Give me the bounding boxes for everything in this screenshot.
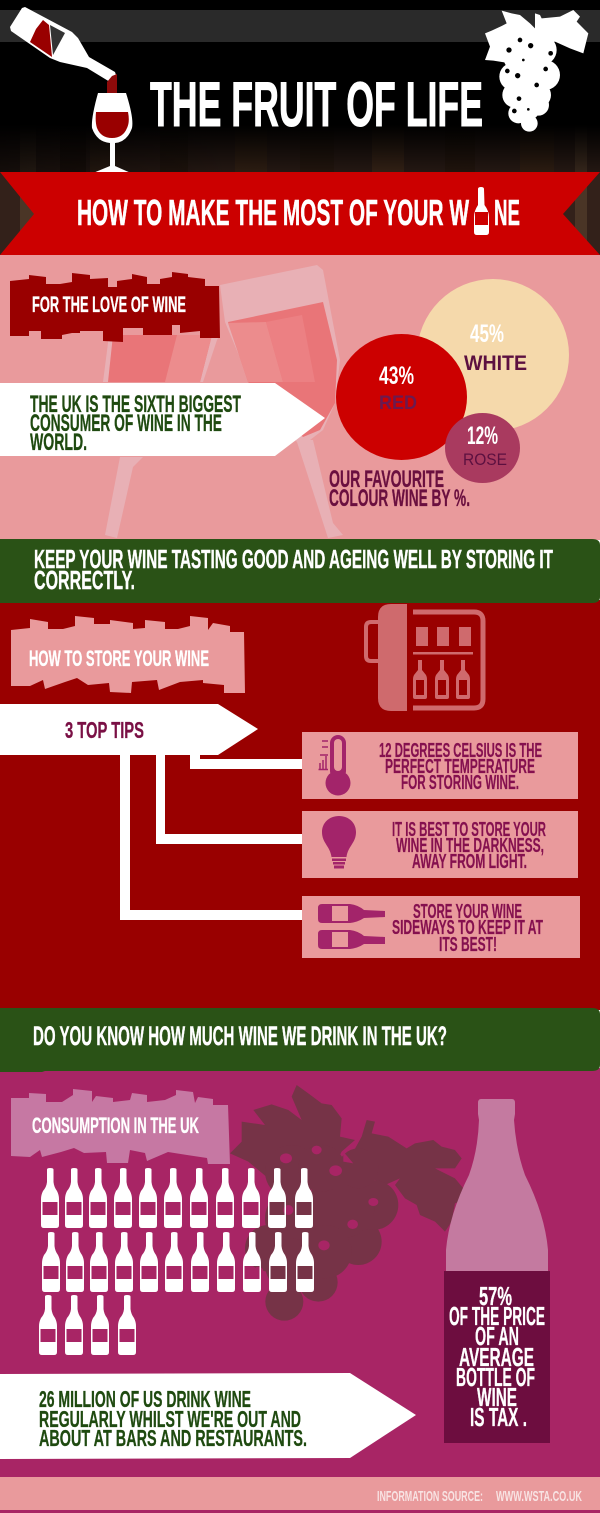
background grapes illustration bbox=[230, 1085, 467, 1321]
red ribbon banner bbox=[0, 172, 600, 255]
bubble: red bbox=[336, 334, 467, 460]
section heading: CONSUMPTION IN THE UK bbox=[32, 1113, 199, 1138]
panel: how to store your wine bbox=[0, 600, 600, 1010]
big bottle: 57 percent tax: BOTTLE OF bbox=[456, 1362, 535, 1392]
arrow callout: 26 million: 26 MILLION OF US DRINK WINE bbox=[39, 1386, 251, 1412]
bubble: red: RED bbox=[379, 393, 417, 414]
big bottle: 57 percent tax: OF AN bbox=[475, 1321, 519, 1351]
connector lines bbox=[120, 755, 302, 920]
chart caption: COLOUR WINE BY %. bbox=[329, 485, 470, 512]
icon: bottle letter bbox=[474, 187, 489, 235]
wood texture bbox=[0, 125, 600, 256]
bubble: rose bbox=[445, 413, 520, 483]
big bottle: 57 percent tax: 57% bbox=[479, 1281, 512, 1311]
panel: consumption in the UK bbox=[0, 1068, 600, 1480]
footer bbox=[0, 1477, 600, 1513]
arrow callout: 3 top tips: 3 TOP TIPS bbox=[65, 717, 144, 743]
tip: temperature bbox=[302, 732, 578, 799]
section heading: HOW TO STORE YOUR WINE bbox=[29, 646, 209, 671]
chart caption bbox=[329, 466, 470, 512]
pictogram: wine bottles bbox=[39, 1168, 314, 1355]
green banner: how much wine we drink bbox=[0, 1008, 600, 1072]
bubble: rose: ROSE bbox=[463, 450, 507, 469]
big bottle: 57 percent tax: AVERAGE bbox=[459, 1342, 534, 1372]
arrow callout: sixth biggest consumer bbox=[0, 383, 325, 456]
big bottle: 57 percent tax: IS TAX . bbox=[470, 1402, 527, 1432]
section tag: for the love of wine bbox=[10, 272, 220, 342]
icon: thermometer bbox=[318, 735, 350, 796]
tip: darkness bbox=[302, 811, 578, 878]
bubble: white bbox=[417, 279, 569, 431]
footer: INFORMATION SOURCE: bbox=[377, 1488, 483, 1505]
icon: light bulb bbox=[322, 816, 356, 868]
arrow callout: 26 million: ABOUT AT BARS AND RESTAURANTS. bbox=[39, 1425, 307, 1451]
arrow callout: 26 million bbox=[0, 1373, 416, 1459]
icon: wine fridge bbox=[366, 604, 483, 711]
arrow callout: sixth biggest consumer: CONSUMER OF WINE IN THE bbox=[30, 410, 222, 437]
section tag: consumption bbox=[11, 1089, 230, 1164]
tip: temperature: FOR STORING WINE. bbox=[401, 772, 519, 794]
tip: sideways: STORE YOUR WINE bbox=[413, 901, 522, 923]
arrow callout: 3 top tips bbox=[0, 704, 258, 755]
arrow callout: sixth biggest consumer: WORLD. bbox=[30, 429, 87, 456]
icon: grapes bbox=[485, 10, 588, 132]
big bottle: 57 percent tax bbox=[444, 1099, 550, 1443]
wine glasses bbox=[103, 265, 343, 538]
green banner: keep your wine tasting good: CORRECTLY. bbox=[34, 565, 135, 595]
icon: sideways bottles bbox=[318, 904, 385, 949]
banner heading end: NE bbox=[494, 192, 520, 233]
bubble chart: favourite colour bbox=[336, 279, 569, 483]
arrow callout: 26 million: REGULARLY WHILST WE'RE OUT AND bbox=[39, 1406, 301, 1432]
tip: darkness: AWAY FROM LIGHT. bbox=[412, 851, 527, 873]
panel: for the love of wine bbox=[0, 255, 600, 540]
bubble: white: 45% bbox=[470, 320, 504, 348]
icon: pouring wine bottle bbox=[10, 7, 117, 93]
bubble: white: WHITE bbox=[464, 352, 527, 375]
green banner: keep your wine tasting good bbox=[0, 539, 600, 603]
tip: sideways: ITS BEST! bbox=[439, 934, 497, 956]
chart caption: OUR FAVOURITE bbox=[329, 466, 444, 493]
grape dots bbox=[505, 38, 553, 113]
big bottle: 57 percent tax: WINE bbox=[477, 1382, 517, 1412]
section heading: FOR THE LOVE OF WINE bbox=[32, 292, 186, 317]
icon: wine glass bbox=[92, 93, 132, 173]
tip: sideways bbox=[302, 896, 580, 958]
arrow callout: sixth biggest consumer: THE UK IS THE SIXTH BIGGEST bbox=[30, 391, 241, 418]
section tag: how to store bbox=[11, 616, 245, 693]
header panel bbox=[0, 0, 600, 256]
bubble: red: 43% bbox=[379, 362, 414, 390]
bubble: rose: 12% bbox=[467, 422, 498, 450]
